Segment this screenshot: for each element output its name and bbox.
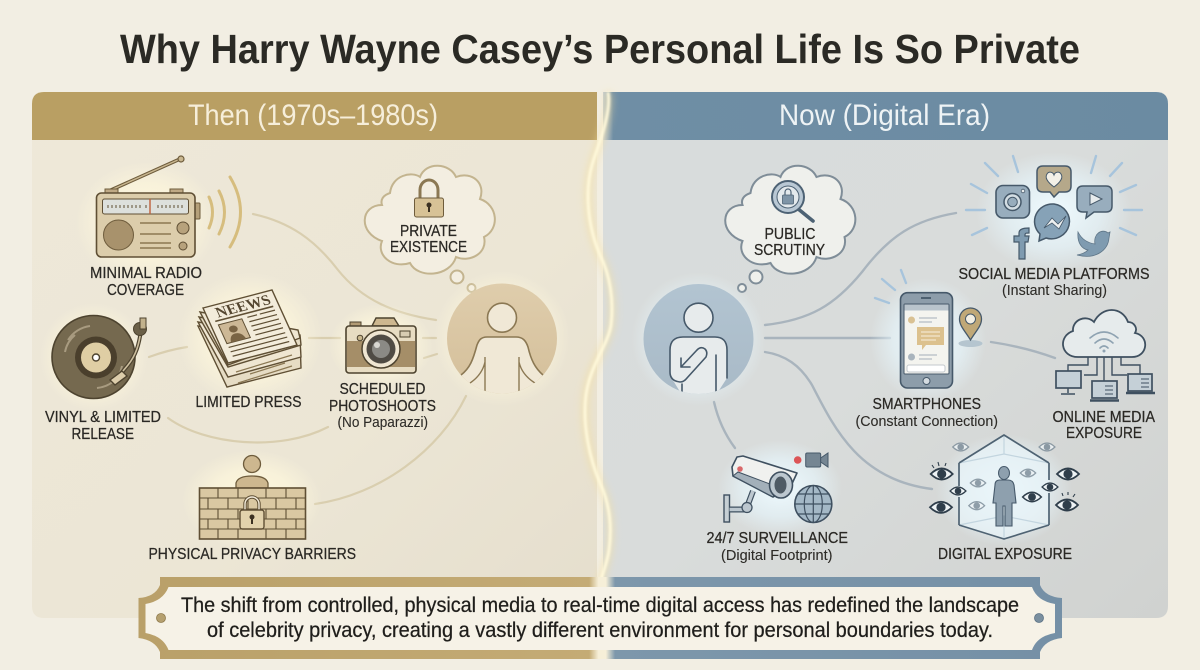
icon: location pin [958,308,982,347]
panel: then [32,92,597,618]
label: limited press: LIMITED PRESS [196,394,302,411]
label: surveillance: (Digital Footprint) [721,547,832,564]
label: online media exposure: EXPOSURE [1066,425,1142,442]
caption text: The shift from controlled, physical media to real-time digital access has redefined the landscape [181,593,1019,617]
then panel header [32,92,597,140]
icon: messenger [1035,204,1069,241]
icon: person now [642,283,755,396]
label: scheduled photoshoots: PHOTOSHOOTS [329,398,436,415]
label: online media exposure: ONLINE MEDIA [1052,409,1155,426]
surveillance eyes [930,462,1079,513]
caption banner [138,577,1062,659]
label: surveillance [706,530,848,564]
label: smartphones: SMARTPHONES [872,396,981,413]
panel: now [603,92,1168,618]
label: scheduled photoshoots [329,381,436,431]
icon: globe [795,486,832,522]
connector lines: now [714,213,1055,489]
label: scheduled photoshoots: (No Paparazzi) [338,414,428,431]
title: Why Harry Wayne Casey’s Personal Life Is So Private [120,26,1080,72]
thought cloud: private existence [365,166,495,292]
icon: play bubble [1077,186,1112,218]
icon: radio [74,156,240,284]
icon: video recording [794,453,828,467]
glowing wave divider [585,92,612,587]
label: minimal radio coverage [90,265,202,299]
now panel header [603,92,1168,140]
thought cloud: private existence: PRIVATE [400,223,457,240]
label: vinyl and limited release [45,409,161,443]
icon: cloud network [1056,310,1155,400]
label: digital exposure: DIGITAL EXPOSURE [938,546,1072,563]
icon: surveillance camera [718,440,842,536]
label: vinyl and limited release: RELEASE [72,426,134,443]
connector lines: then [149,214,466,504]
caption text [181,593,1019,642]
caption text: of celebrity privacy, creating a vastly different environment for personal boundaries today. [207,618,993,642]
icon: brick wall with person [182,450,322,550]
then panel header: Then (1970s–1980s) [188,99,438,132]
label: social media platforms: (Instant Sharing) [1002,282,1107,299]
label: minimal radio coverage: MINIMAL RADIO [90,265,202,282]
icon: facebook [1014,228,1029,259]
icon: instagram [996,186,1030,218]
icon: person then [447,283,557,394]
label: surveillance: 24/7 SURVEILLANCE [706,530,848,547]
icon: digital exposure glass box [930,434,1079,546]
thought cloud: private existence: EXISTENCE [390,239,467,256]
label: vinyl and limited release: VINYL & LIMITED [45,409,161,426]
thought cloud: public scrutiny: SCRUTINY [754,242,825,259]
now panel header: Now (Digital Era) [779,99,990,132]
label: physical privacy barriers: PHYSICAL PRIVACY BARRIERS [148,546,356,563]
label: smartphones [856,396,998,430]
label: smartphones: (Constant Connection) [856,413,998,430]
icon: newspaper stack [178,272,322,404]
label: minimal radio coverage: COVERAGE [107,282,184,299]
label: scheduled photoshoots: SCHEDULED [340,381,426,398]
icon: twitter bird [1077,231,1110,256]
icon: newspaper stack: NEEWS [212,291,273,321]
icon: heart bubble [1037,166,1071,197]
label: social media platforms: SOCIAL MEDIA PLATFORMS [958,266,1150,283]
thought cloud: public scrutiny: PUBLIC [764,226,816,243]
icon: social media platforms [966,152,1142,272]
icon: vinyl record [40,303,148,411]
label: online media exposure [1052,409,1155,442]
faint eyes [953,443,1055,510]
rays [966,156,1142,235]
icon: smartphone [870,270,986,402]
label: social media platforms [958,266,1150,299]
icon: camera [329,304,433,388]
thought cloud: public scrutiny [725,166,855,292]
